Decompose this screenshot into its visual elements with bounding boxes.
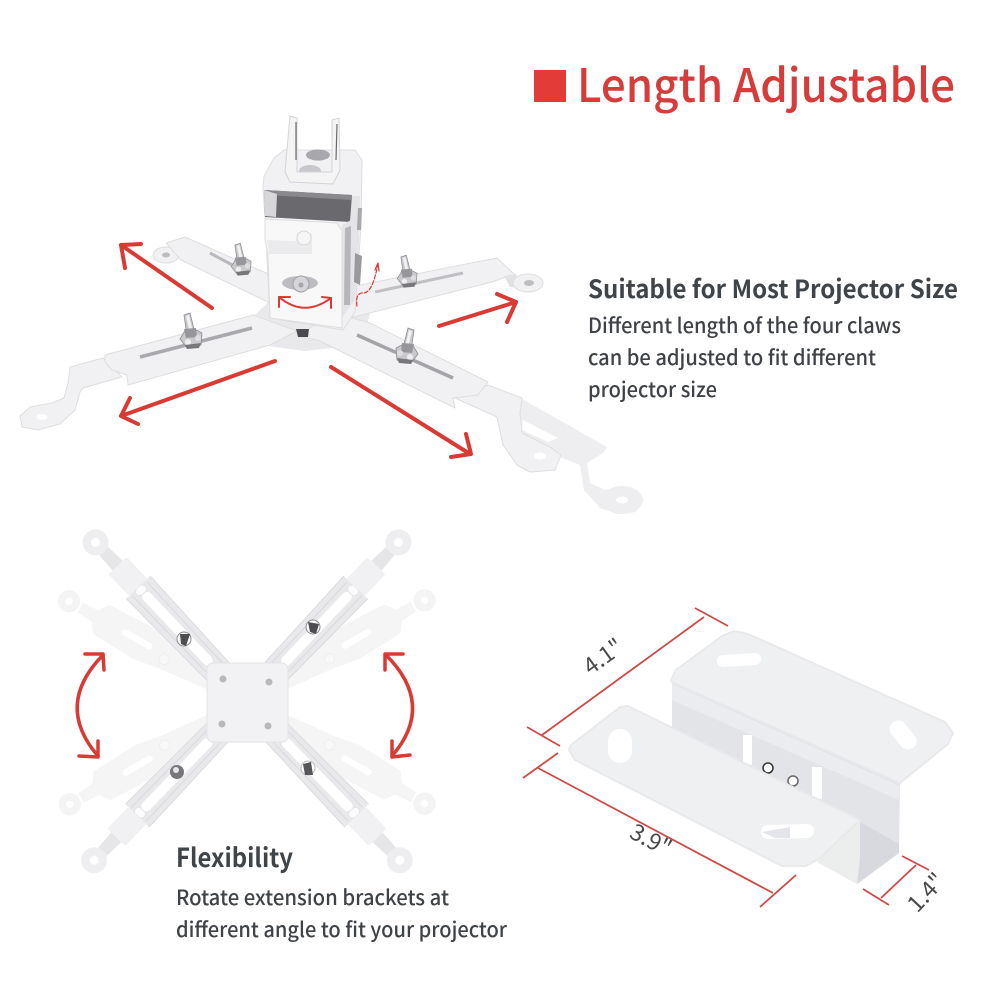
dimension: 1.4 inch — [863, 856, 952, 918]
ghost arms — [50, 579, 443, 826]
text block: flexibility: Rotate extension brackets at — [176, 882, 449, 912]
arrow: tilt — [357, 263, 379, 306]
front flange — [569, 706, 860, 866]
dimension: 4.1 inch: 4.1" — [575, 629, 629, 681]
text block: suitable for most projector size: Suitable for Most Projector Size — [588, 270, 958, 306]
back-right arm — [345, 255, 543, 318]
front-left arm — [20, 313, 297, 430]
text block: flexibility: different angle to fit your projector — [176, 914, 507, 944]
arrow: front-left — [121, 361, 275, 424]
dimension: 3.9 inch: 3.9" — [625, 813, 679, 863]
front-right arm — [300, 318, 561, 472]
arrow: left rotation — [77, 654, 104, 757]
channel bottom — [817, 820, 899, 884]
product photo: projector mount with arrows — [20, 116, 644, 514]
back-left arm — [153, 237, 276, 306]
arrow: back-left — [121, 244, 212, 308]
dimension: 4.1 inch — [527, 608, 728, 746]
text block: suitable for most projector size: Different length of the four claws — [588, 310, 901, 340]
product photo: bracket with dimensions — [523, 608, 953, 918]
dimension: 3.9 inch — [523, 753, 796, 907]
solid arms — [73, 522, 421, 881]
tube body — [263, 116, 362, 330]
arrow: back-right — [439, 294, 516, 326]
back wall and top flange — [671, 631, 953, 884]
center plate — [207, 663, 288, 742]
top plate bolts and tabs — [306, 150, 330, 160]
front plate — [265, 219, 342, 328]
text block: suitable for most projector size — [588, 270, 958, 404]
title: Length Adjustable — [577, 50, 955, 116]
text block: suitable for most projector size: projector size — [588, 374, 717, 404]
product photo: bottom plate with rotating arms — [50, 522, 443, 881]
text block: flexibility — [176, 838, 507, 944]
dimension: 1.4 inch: 1.4" — [898, 864, 952, 918]
wing bolts — [170, 620, 320, 779]
arrow: rotate bolt — [279, 297, 331, 308]
ghost extension of front-right arm — [510, 395, 644, 514]
arrow: right rotation — [385, 654, 413, 757]
hub gap — [296, 329, 309, 337]
hub plate — [250, 298, 370, 351]
text block: suitable for most projector size: can be adjusted to fit different — [588, 342, 876, 372]
arrow: front-right — [331, 367, 471, 457]
text block: flexibility: Flexibility — [176, 838, 293, 875]
wing bolt — [282, 276, 318, 290]
